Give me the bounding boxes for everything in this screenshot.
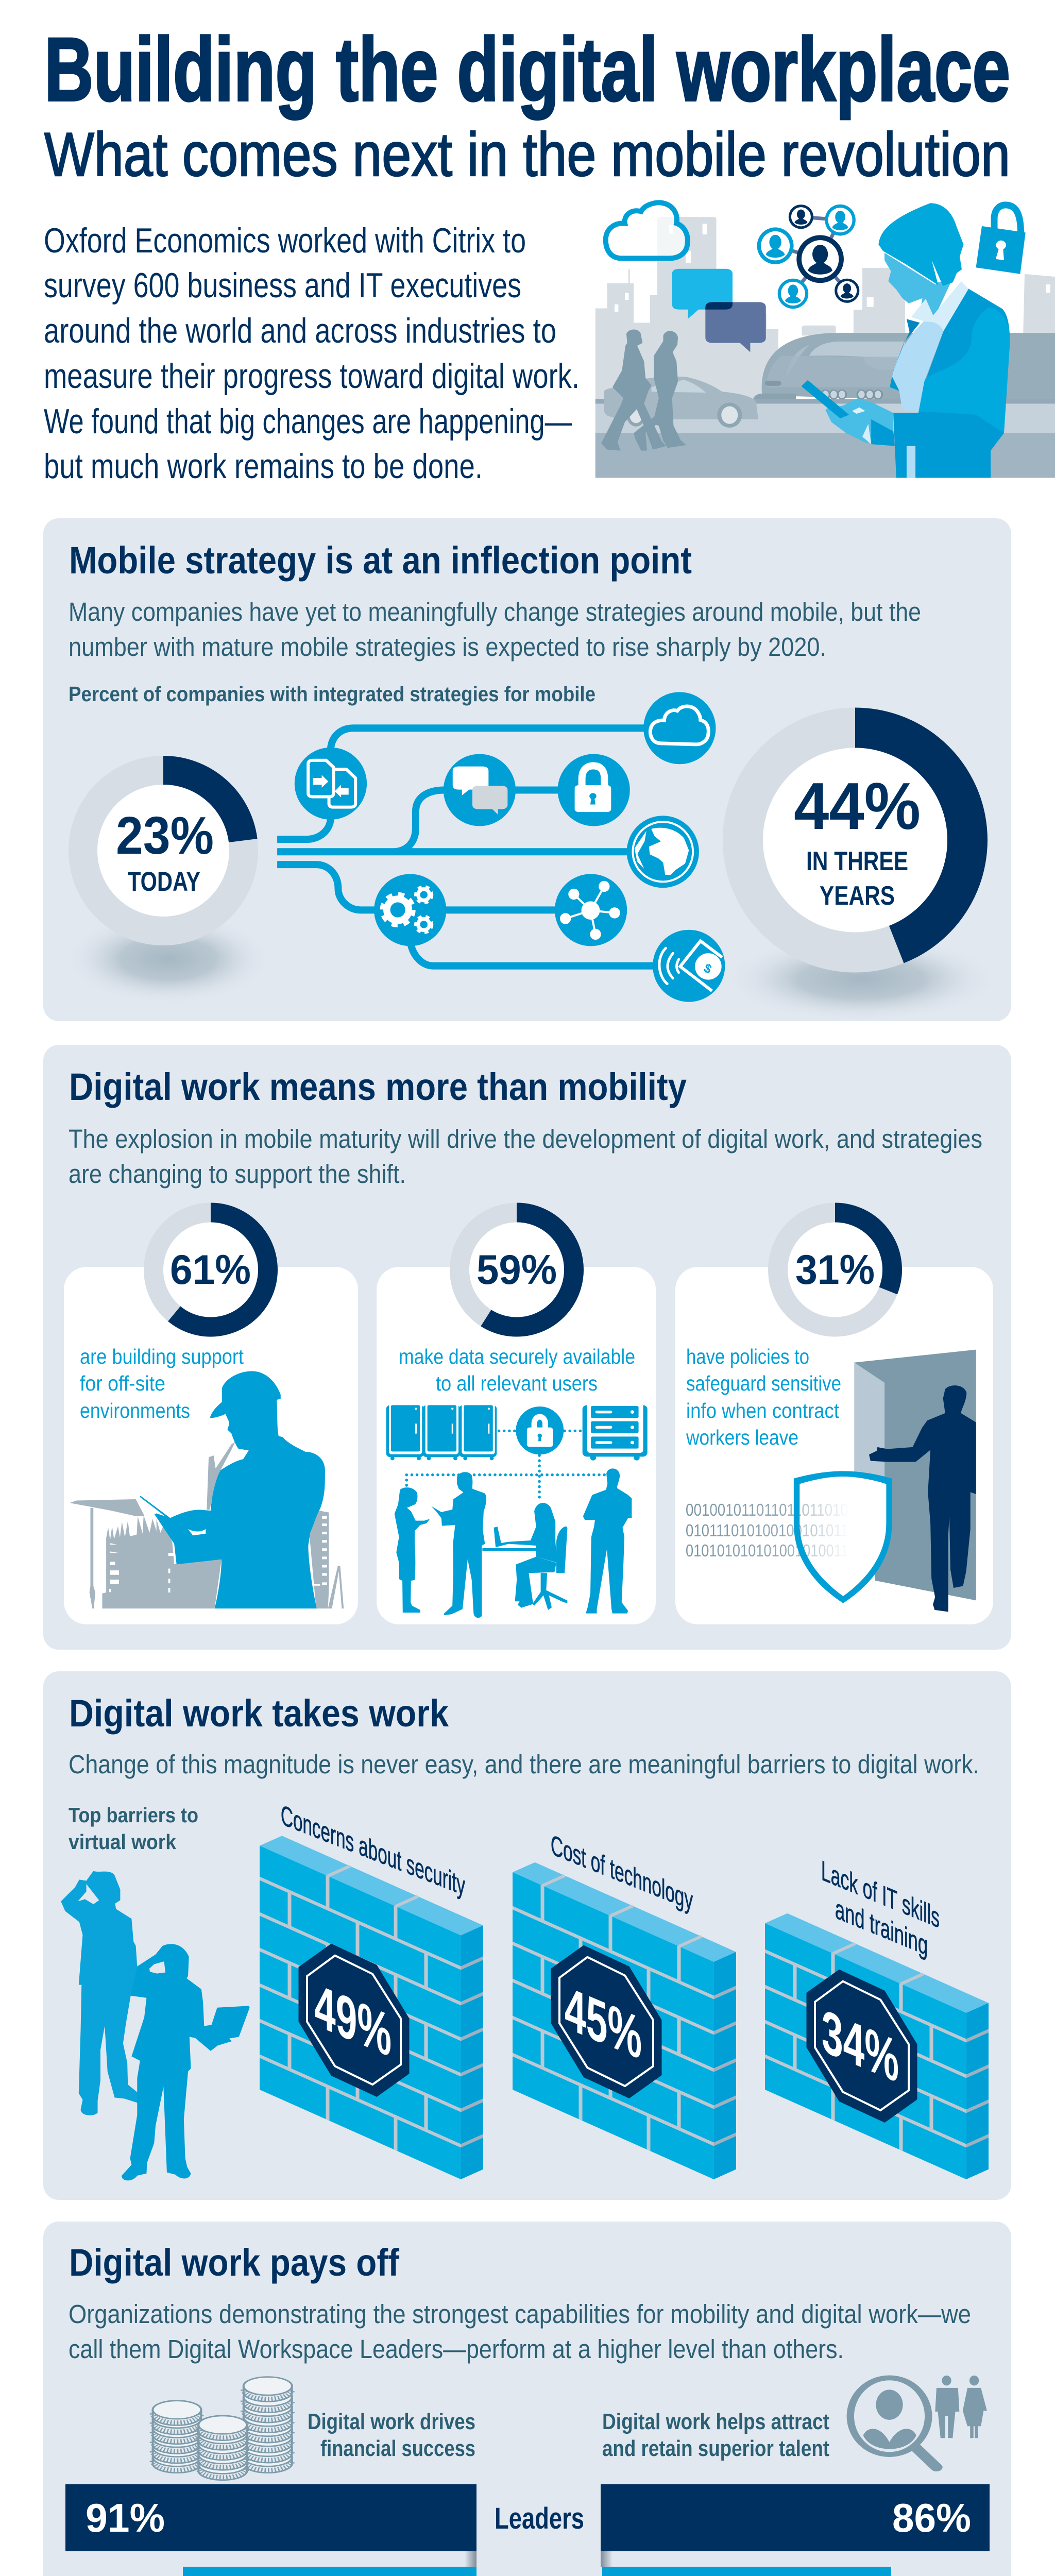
chart label: Percent of companies with integrated strategies for mobile [69, 682, 595, 706]
intro text block: but much work remains to be done. [44, 447, 483, 486]
bar: leaders, talent [601, 2484, 990, 2551]
icon: chat bubbles [453, 767, 507, 815]
icon: car [604, 377, 758, 428]
chart captions: and retain superior talent [602, 2436, 829, 2461]
bar values [86, 2495, 971, 2576]
binary data stream: 010101010101001010011 [686, 1541, 848, 1560]
donut: 31%: 31% [795, 1247, 875, 1293]
intro text block: survey 600 business and IT executives [44, 266, 521, 305]
card text: info when contract [686, 1399, 840, 1422]
bar: others, talent [602, 2567, 891, 2576]
card: secure data [377, 1213, 656, 1624]
donut: 61% [154, 1213, 268, 1327]
donut chart: 44% in three years [722, 727, 1000, 1023]
card text: have policies to [686, 1345, 809, 1368]
icon: gears [383, 887, 431, 932]
chart captions: Digital work drives [308, 2409, 475, 2434]
octagon badge [551, 1945, 661, 2098]
circuit diagram of mobile technologies [277, 692, 725, 1002]
chart label: Top barriers to [69, 1803, 198, 1827]
intro text block [44, 221, 580, 486]
icon: shield [794, 1471, 892, 1603]
chart label: virtual work [69, 1830, 176, 1854]
icon: cloud [606, 202, 688, 258]
card text: are building support [80, 1345, 244, 1368]
card: off-site support [64, 1213, 358, 1624]
card text [399, 1345, 635, 1395]
octagon badge: 34% [822, 1996, 899, 2096]
donut: 61%: 61% [170, 1247, 251, 1293]
body text: Many companies have yet to meaningfully change strategies around mobile, but the [69, 597, 921, 626]
chart captions [308, 2409, 829, 2461]
body text: call them Digital Workspace Leaders—perform at a higher level than others. [69, 2334, 844, 2364]
icon: commuters [601, 329, 686, 451]
bar values: 86% [892, 2495, 971, 2540]
icon: padlock [976, 205, 1026, 274]
panel: mobile strategy [43, 518, 1011, 1023]
card text: to all relevant users [436, 1371, 598, 1395]
card text [80, 1345, 244, 1422]
binary data stream: 010111010100100101011 [686, 1521, 848, 1540]
octagon badge: 45% [565, 1973, 642, 2073]
brick wall: cost of technology 45% [513, 1828, 736, 2189]
body text: Organizations demonstrating the strongest capabilities for mobility and digital work—we [69, 2299, 971, 2329]
body text [69, 2299, 971, 2364]
icon: man and woman [935, 2376, 987, 2438]
donut chart: 23% today [62, 770, 274, 1005]
octagon badge [299, 1944, 409, 2097]
card text: for off-site [80, 1371, 165, 1395]
icon: magnifier over candidate [850, 2378, 937, 2467]
intro text block: Oxford Economics worked with Citrix to [44, 221, 526, 260]
brick wall: concerns about security 49% [260, 1799, 483, 2189]
panel: digital work takes work [43, 1671, 1011, 2200]
donut chart: 23% today: 23% [116, 806, 214, 865]
bar: leaders, financial [65, 2484, 477, 2551]
bar: others, financial [183, 2567, 477, 2576]
card text: workers leave [686, 1426, 798, 1449]
icon: people network [757, 205, 859, 309]
icon: mobile payment: $ [702, 961, 714, 977]
intro text block: We found that big changes are happening— [44, 402, 572, 441]
card text: environments [80, 1399, 190, 1422]
card text: safeguard sensitive [686, 1371, 841, 1395]
donut: 59%: 59% [477, 1247, 557, 1293]
illustration: doorway and departing worker [799, 1350, 976, 1612]
intro text block: around the world and across industries to [44, 311, 556, 350]
hero illustration: city, commuters and woman with phone [595, 202, 1055, 478]
icon: coin stacks [152, 2377, 292, 2480]
body text: number with mature mobile strategies is expected to rise sharply by 2020. [69, 632, 826, 662]
donut chart: 23% today: TODAY [128, 867, 200, 897]
wall label: Concerns about security [281, 1799, 465, 1902]
binary data stream [686, 1500, 848, 1560]
body text: are changing to support the shift. [69, 1159, 406, 1189]
icon: network hub [560, 881, 620, 940]
chart captions: Digital work helps attract [602, 2409, 829, 2434]
icon: padlock [575, 766, 611, 812]
donut chart: 44% in three years: IN THREE [806, 846, 908, 876]
body text [69, 1124, 982, 1189]
panel: digital work pays off [43, 2222, 1011, 2576]
heading: Digital work means more than mobility [69, 1065, 687, 1108]
series label: leaders: Leaders [495, 2502, 584, 2535]
binary data stream: 001001011011011011010 [686, 1500, 848, 1519]
icons: coins and talent search [152, 2376, 987, 2480]
octagon badge [807, 1970, 917, 2123]
chart captions: financial success [320, 2436, 475, 2461]
donut: 31% [778, 1213, 892, 1327]
wall label: Lack of IT skills [821, 1854, 940, 1934]
illustration: worker with tablet at construction site [70, 1371, 344, 1608]
wall label: Cost of technology [551, 1828, 693, 1917]
icon: speech bubbles [672, 269, 766, 352]
heading: Digital work takes work [69, 1692, 449, 1735]
donut: 59% [460, 1213, 574, 1327]
chart label [69, 1803, 198, 1854]
icon: documents [308, 760, 355, 807]
donut chart: 44% in three years: YEARS [820, 881, 895, 911]
diverging bar chart [65, 2484, 990, 2576]
icon: mobile payment [659, 941, 722, 991]
bar values: 91% [86, 2495, 165, 2540]
wall label [821, 1854, 940, 1961]
body text [69, 597, 921, 662]
card: contract workers [675, 1213, 993, 1624]
brick wall: lack of IT skills and training 34% [765, 1854, 989, 2189]
heading: Digital work pays off [69, 2241, 399, 2284]
icon: bus [753, 333, 1055, 399]
panel: digital work means more than mobility [43, 1045, 1011, 1650]
card text: make data securely available [399, 1345, 635, 1368]
intro text block: measure their progress toward digital work. [44, 357, 580, 396]
card text [686, 1345, 841, 1449]
woman with phone [801, 203, 1010, 478]
illustration: servers, padlock and connected users [386, 1403, 648, 1618]
heading: Mobile strategy is at an inflection point [69, 539, 692, 582]
wall label: and training [835, 1892, 928, 1961]
icon: globe [633, 822, 693, 882]
illustration: two people looking at walls [61, 1871, 250, 2180]
icon: cloud [650, 706, 708, 744]
octagon badge: 49% [314, 1971, 392, 2070]
donut chart: 44% in three years: 44% [794, 769, 921, 843]
